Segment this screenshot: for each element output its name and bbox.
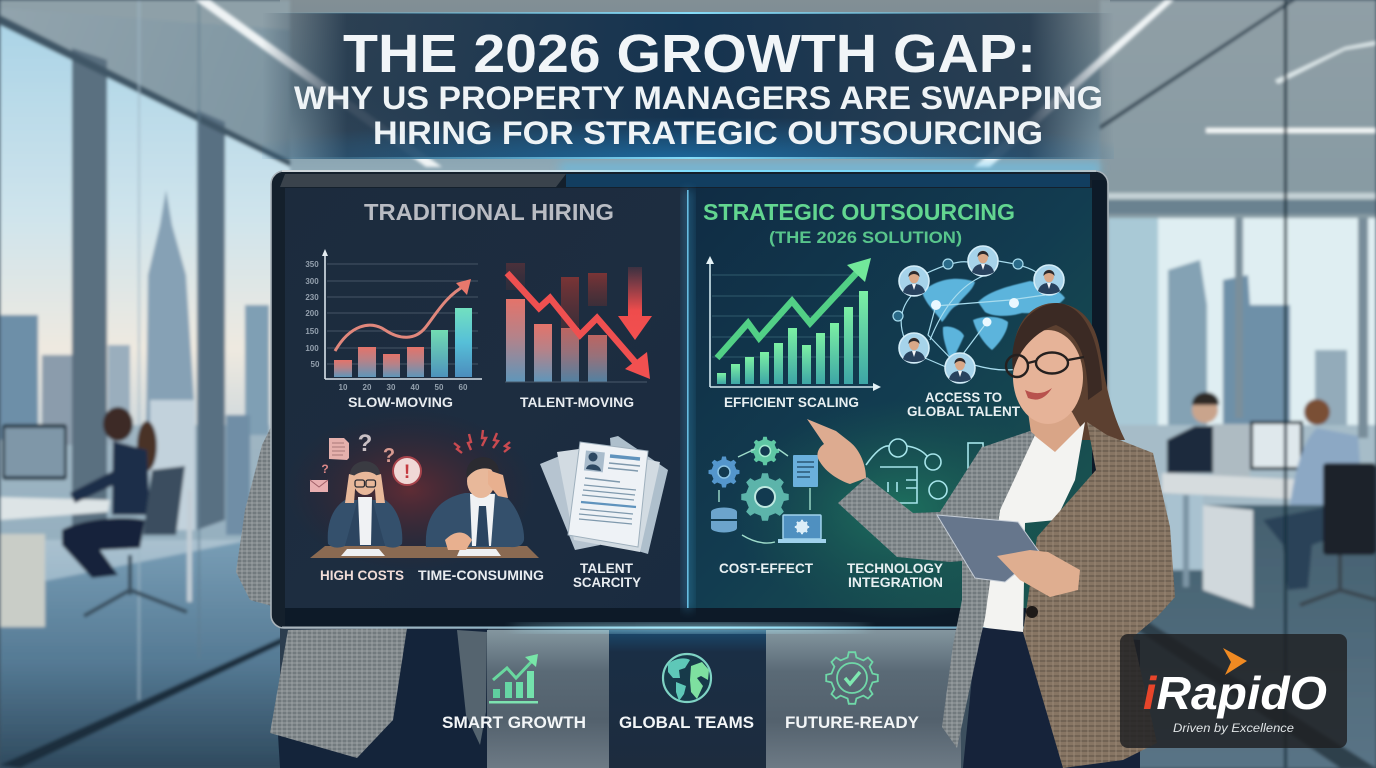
label: global teams: GLOBAL TEAMS [619,713,754,732]
sleeve left of screen [236,425,272,606]
icon: stress symbols: ? [383,445,395,467]
label: technology integration: INTEGRATION [848,575,943,590]
background: ceiling behind title [280,0,1110,178]
presenter behind the screen [236,425,488,768]
panel: global teams background [609,630,766,768]
heading: traditional hiring: TRADITIONAL HIRING [364,199,614,225]
glasses [1006,352,1084,377]
label: slow-moving: SLOW-MOVING [348,394,453,410]
chart: slow-moving: 300 [305,277,319,286]
background: left office [0,0,290,768]
title banner [262,12,1114,159]
background: right office [1100,0,1376,768]
chart: slow-moving: 100 [305,344,319,353]
icon: stress symbols: ? [358,430,372,457]
hair front [1012,303,1102,400]
frame highlight [280,174,566,187]
red glow behind managers [285,410,535,570]
holding hand [997,550,1080,597]
icon: gear with check [826,652,878,704]
bottom feature panels [442,630,961,768]
icon: stress symbols [310,430,421,492]
chart: efficient scaling [706,256,881,391]
label: talent scarcity: SCARCITY [573,575,641,590]
background: desk and drawers [1162,473,1313,608]
screen glow [560,164,1100,172]
wordmark: iRapidO [1143,667,1327,719]
title line 3: HIRING FOR STRATEGIC OUTSOURCING [373,115,1043,151]
label: future-ready: FUTURE-READY [785,713,920,732]
label: access to global talent: GLOBAL TALENT [907,403,1020,419]
chart: slow-moving: 10 [339,383,348,392]
chart: slow-moving: 40 [411,383,420,392]
chart: slow-moving: 150 [305,327,319,336]
label: talent-moving: TALENT-MOVING [520,394,634,410]
divider glow [684,190,692,610]
icon: stress symbols: ! [404,462,410,483]
presenter woman [807,303,1175,768]
background: monitor and desk [0,424,192,627]
panel background [285,188,688,608]
smile [1025,388,1052,400]
chart: slow-moving: 50 [435,383,444,392]
icon: orange arrow [1223,648,1247,675]
chart: talent-moving [505,263,652,382]
panel background [688,188,1092,608]
heading: strategic outsourcing: STRATEGIC OUTSOURCING [703,199,1015,225]
icon: cost-effect gears [709,437,826,543]
background: colleague in chair [1263,399,1376,605]
panel: strategic outsourcing [684,188,1092,620]
jacket right front [1023,422,1175,768]
icon: stack of resumes [540,436,668,554]
label: talent scarcity [573,561,641,590]
background: seated woman [62,407,187,616]
banner bottom glow [262,83,1114,159]
banner background [262,13,1114,159]
label: access to global talent [907,389,1020,419]
jacket hem [270,628,407,758]
icon: stressed man at desk [426,457,524,550]
chart: slow-moving: 350 [305,260,319,269]
comparison screen [271,164,1108,631]
panel: future-ready background [766,630,961,768]
jacket left front [942,431,1035,748]
pointing hand [807,419,866,484]
logo background [1120,634,1347,748]
background: colleague at desk [1167,392,1303,478]
label: time-consuming: TIME-CONSUMING [418,568,544,583]
label: technology integration [847,561,943,590]
bottom edge glow [510,625,870,631]
chart: slow-moving: 230 [305,293,319,302]
label: technology integration: TECHNOLOGY [847,561,943,576]
screen frame [271,171,1108,628]
subheading: the 2026 solution: (THE 2026 SOLUTION) [769,228,962,247]
chart: slow-moving: 20 [363,383,372,392]
tagline: Driven by Excellence [1173,721,1294,735]
network links [901,261,1045,370]
world map [922,279,1065,362]
icon: stressed woman at desk [310,461,539,558]
chart: slow-moving [305,249,482,392]
title line 2: WHY US PROPERTY MANAGERS ARE SWAPPING [294,80,1103,116]
icon: red stress sparks [454,430,510,453]
icon: technology integration [866,439,983,503]
chart: slow-moving: 30 [387,383,396,392]
label: access to global talent: ACCESS TO [925,389,1002,405]
logo card [1120,634,1347,748]
tablet [937,515,1040,582]
background: ceiling light strips [195,0,1174,167]
jacket flap over panel [457,630,487,745]
chart: slow-moving: 200 [305,309,319,318]
jacket button [1026,606,1038,618]
desk [310,546,539,558]
icon: globe [663,654,711,702]
icon: smart growth chart [489,654,538,704]
label: efficient scaling: EFFICIENT SCALING [724,394,859,410]
title line 1: THE 2026 GROWTH GAP: [343,24,1036,84]
chart: slow-moving: 60 [459,383,468,392]
green glow [730,400,1070,620]
label: high costs: HIGH COSTS [320,568,404,583]
pointing arm [838,445,983,562]
trousers [278,628,488,768]
label: talent scarcity: TALENT [580,561,634,576]
panel: smart growth background [487,630,609,768]
background: centre behind screen [280,628,960,768]
icon: global talent network [893,246,1065,383]
icon: stress symbols: ? [321,462,329,476]
label: cost-effect: COST-EFFECT [719,561,814,576]
chart: slow-moving: 50 [311,360,320,369]
label: smart growth: SMART GROWTH [442,713,586,732]
panel: traditional hiring [285,188,688,608]
neck [1028,412,1082,462]
hair back [1014,303,1125,440]
trousers [963,627,1063,768]
shirt [983,422,1085,637]
face [1013,330,1083,424]
